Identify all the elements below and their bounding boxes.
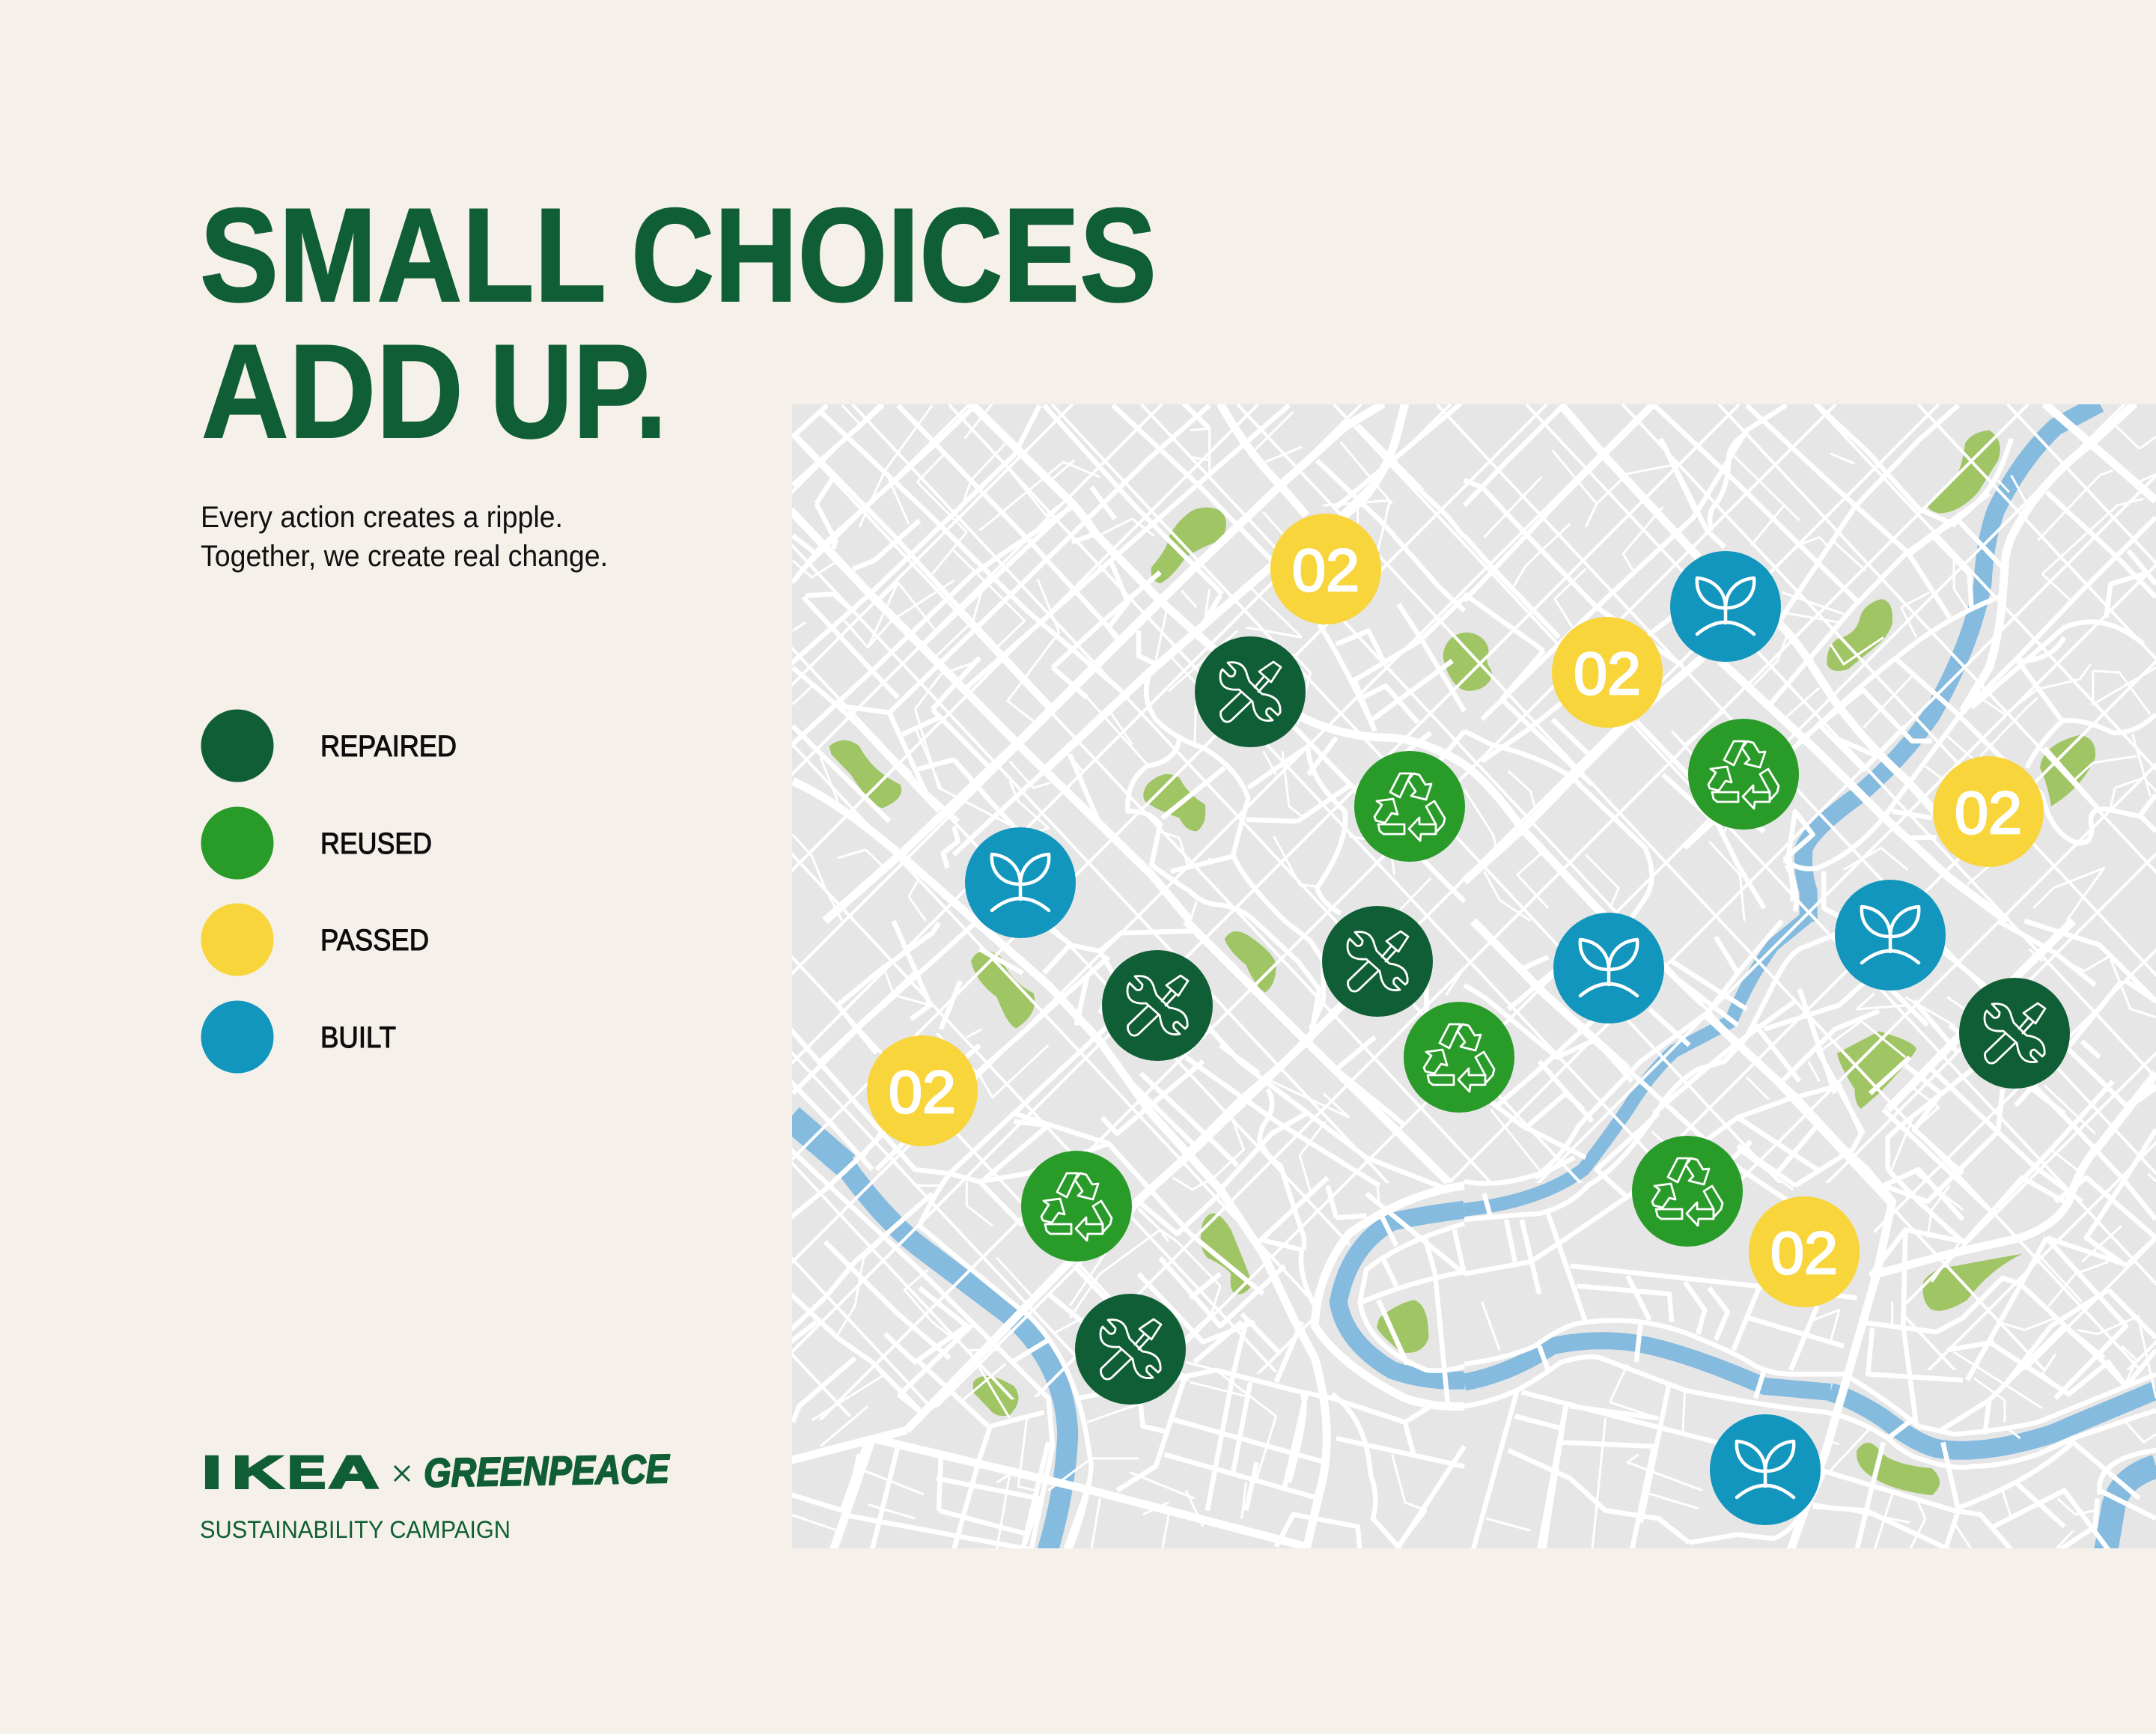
park bbox=[1928, 431, 2000, 513]
roads: regular diagonal street grid bbox=[792, 404, 2156, 1420]
roads: south-west district bbox=[791, 921, 1464, 1550]
park bbox=[973, 1376, 1018, 1416]
legend item: passed bbox=[201, 903, 429, 976]
roads: north-east district bbox=[1464, 404, 2156, 921]
marker: built bbox=[1553, 913, 1664, 1023]
marker: passed: 02 bbox=[1955, 779, 2022, 846]
marker: reused bbox=[1021, 1151, 1132, 1262]
marker: passed: 02 bbox=[1574, 640, 1641, 707]
marker: reused bbox=[1632, 1136, 1743, 1247]
park bbox=[1377, 1300, 1428, 1353]
park bbox=[1837, 1031, 1916, 1109]
park bbox=[1201, 1214, 1252, 1295]
park bbox=[1857, 1443, 1940, 1495]
panel: city map bbox=[792, 404, 2156, 1548]
legend item: built: BUILT bbox=[320, 1021, 396, 1054]
marker: built bbox=[1710, 1414, 1821, 1525]
roads: north-west district bbox=[791, 404, 1464, 921]
title: UP. bbox=[490, 317, 667, 466]
legend bbox=[201, 710, 457, 1074]
marker: reused bbox=[1354, 751, 1465, 862]
marker: passed bbox=[867, 1035, 978, 1146]
marker: reused bbox=[1404, 1002, 1514, 1113]
marker: repaired bbox=[1102, 950, 1213, 1061]
logo: IKEA: A bbox=[329, 1446, 379, 1497]
legend item: reused bbox=[201, 807, 432, 879]
title: SMALL bbox=[200, 180, 606, 329]
legend item: repaired bbox=[201, 710, 457, 782]
marker: built bbox=[1670, 551, 1781, 662]
marker: repaired bbox=[1075, 1294, 1186, 1405]
marker: built bbox=[965, 827, 1076, 938]
cross symbol bbox=[395, 1466, 409, 1481]
legend item: built bbox=[201, 1000, 396, 1074]
marker: repaired bbox=[1322, 906, 1433, 1017]
title: CHOICES bbox=[631, 180, 1157, 329]
roads: south-east district bbox=[1464, 921, 2156, 1550]
logo: IKEA: K bbox=[232, 1446, 283, 1497]
logo: IKEA: E bbox=[287, 1446, 326, 1497]
logo: Greenpeace: GREENPEACE bbox=[424, 1446, 671, 1496]
park bbox=[829, 740, 901, 808]
marker: repaired bbox=[1959, 978, 2070, 1089]
title: ADD bbox=[201, 317, 463, 466]
marker: passed bbox=[1552, 617, 1663, 728]
subtitle text: Together, we create real change. bbox=[201, 540, 608, 573]
logo: IKEA: I bbox=[202, 1446, 222, 1497]
marker: passed: 02 bbox=[1770, 1220, 1838, 1286]
marker: reused bbox=[1688, 719, 1799, 830]
logo: IKEA bbox=[202, 1446, 379, 1497]
subtitle text bbox=[201, 501, 608, 573]
subtitle text: Every action creates a ripple. bbox=[201, 501, 563, 534]
park bbox=[1151, 508, 1226, 583]
legend item: passed: PASSED bbox=[320, 924, 429, 957]
footer logos bbox=[200, 1446, 671, 1543]
park bbox=[1922, 1254, 2022, 1311]
marker: passed: 02 bbox=[1292, 537, 1359, 603]
rivers bbox=[1803, 404, 2100, 922]
marker: passed: 02 bbox=[889, 1059, 956, 1125]
campaign label: SUSTAINABILITY CAMPAIGN bbox=[200, 1516, 511, 1543]
marker: passed bbox=[1270, 514, 1381, 624]
park bbox=[1143, 774, 1205, 831]
park bbox=[1443, 633, 1492, 691]
marker: passed bbox=[1749, 1196, 1860, 1307]
marker: passed bbox=[1933, 756, 2044, 867]
park bbox=[1827, 599, 1892, 671]
parks bbox=[829, 431, 2095, 1495]
marker: repaired bbox=[1195, 636, 1306, 747]
marker: built bbox=[1835, 880, 1946, 991]
park bbox=[971, 951, 1035, 1029]
park bbox=[2040, 735, 2095, 806]
legend item: reused: REUSED bbox=[320, 827, 432, 860]
legend item: repaired: REPAIRED bbox=[320, 730, 457, 763]
title bbox=[200, 180, 1157, 466]
park bbox=[1225, 931, 1276, 992]
